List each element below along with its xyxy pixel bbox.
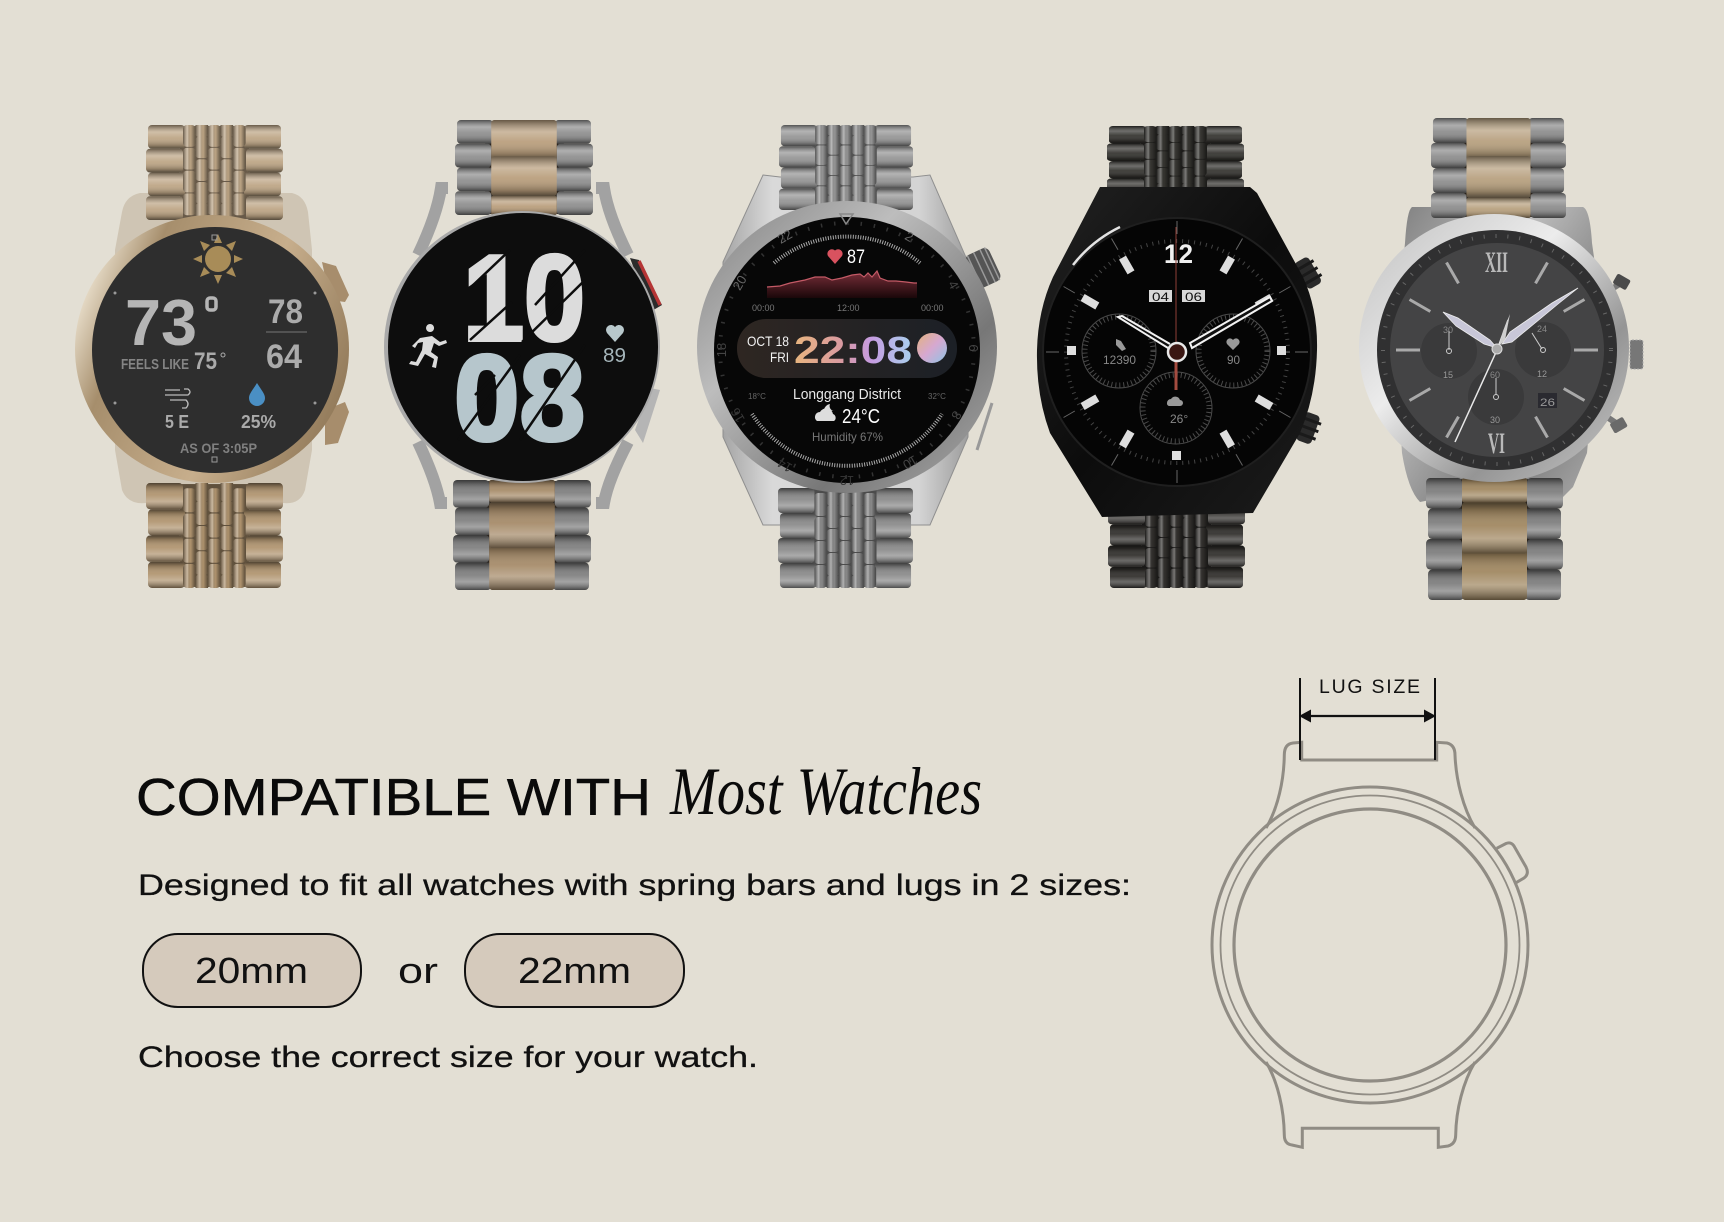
low 64: 64 [266,338,302,376]
bezel numerals: 12 [840,473,854,488]
sub-dial: weather: 26° [1170,412,1188,426]
button bottom [1293,410,1323,446]
chart time labels: 12:00 [837,303,860,313]
bottom lugs [1266,1062,1475,1147]
watch 5: analog chronograph [1359,118,1643,600]
heart rate value: 87 [847,247,865,268]
numeral VI: VI [1488,427,1505,460]
sub-dial right [1515,322,1571,379]
watch 4: black chronograph smartwatch [1037,119,1325,596]
dial dots [114,235,316,462]
humidity: Humidity 67% [812,430,883,444]
size pill: 20mm: 20mm [195,950,308,991]
pusher bottom [1607,417,1619,425]
crown [1630,340,1643,369]
arc ticks [752,237,942,466]
heading sans part: COMPATIBLE WITH [136,769,651,827]
heart rate chart [767,271,917,298]
top lugs [1266,742,1475,828]
black bead bracelet top [1107,119,1244,200]
icon: runner [409,324,447,368]
hour hand [1118,316,1170,348]
bezel numerals: 10 [900,452,920,473]
second hand tail [1174,360,1178,390]
size pill: 20mm [143,934,361,1007]
arrow [1299,710,1436,722]
numeral XII: XII [1485,246,1508,279]
small degree [221,353,225,357]
second hand [1455,320,1508,442]
bezel numerals: 6 [966,344,981,352]
outer track [1377,230,1617,470]
closing text: Choose the correct size for your watch. [138,1041,758,1074]
icon: water drop [249,383,265,406]
button top [1291,255,1325,291]
digital time: 22:08 [794,330,912,372]
minute ticks [1383,236,1611,464]
heading serif italic part: Most Watches [669,753,982,829]
gold bead bracelet top [146,116,283,225]
bezel numerals: 22 [775,226,795,247]
silver lugs [418,188,628,503]
wind value: 5 E [165,412,189,432]
lug size measurement [1299,676,1436,760]
bezel numerals: 2 [902,228,916,245]
steel lugs [1395,207,1600,502]
dial [92,227,338,473]
temperature 73: 73 [125,286,197,359]
middle ring [1220,796,1520,1094]
centre pin [1168,343,1186,361]
sub-dial: heart rate: 90 [1227,353,1240,367]
red button highlight [639,261,660,305]
bezel highlight [1073,227,1120,265]
icon: cloud and moon [815,404,836,421]
crown [964,246,1002,290]
dial face [1390,243,1604,457]
bezel [697,201,997,493]
crown [1497,843,1527,883]
inner dial ring [1234,809,1506,1081]
digit slashes [458,250,585,440]
steel and gold bracelet bottom [1426,478,1563,600]
location: Longgang District [793,386,902,403]
steel bead bracelet bottom [778,483,913,598]
red button [630,258,662,312]
silver case and lugs [723,175,968,525]
temperature: 24°C [842,406,880,428]
black glass [714,217,980,483]
black glass [388,213,658,481]
updated time: AS OF 3:05P [180,440,257,456]
divider [266,331,307,333]
steel bead bracelet top [779,116,913,214]
icon: heart [827,249,843,264]
hour 10: 10 [463,230,585,366]
sub-dial: weather [1140,372,1212,444]
bezel numerals [714,226,981,488]
date boxes [1149,290,1205,302]
second hand tip [1499,314,1510,346]
time pill [737,319,957,378]
steel and gold bracelet bottom [453,480,591,590]
low temperature: 18°C [748,392,766,401]
minute hand [1190,297,1272,348]
numeral 12: 12 [1164,239,1193,269]
silver button [635,388,660,443]
size pill: 22mm [465,934,684,1007]
heart rate: 89 [603,345,626,367]
chart line [767,271,917,287]
intro text: Designed to fit all watches with spring bars and lugs in 2 sizes: [138,869,1131,902]
sub-dial centre: 30 [1490,415,1500,425]
high 78: 78 [268,293,303,331]
icon: heart [606,325,624,342]
steel and gold bracelet top [455,120,593,215]
sub-dial right: 12 [1537,369,1547,379]
gold bezel [75,215,349,483]
hour markers [1396,262,1598,438]
case ring [384,211,660,483]
hour markers [1067,256,1286,460]
sub-dial left: 15 [1443,370,1453,380]
watch outline diagram [1212,742,1528,1147]
size pill: 22mm: 22mm [518,950,631,991]
pusher top cap [1612,273,1631,290]
bezel hour ticks [720,223,974,477]
feels like label: FEELS LIKE [121,356,189,373]
top triangle marker [840,214,853,224]
minute 08: 08 [454,330,585,466]
sub-dial centre: 60 [1490,370,1500,380]
colour orb [917,333,947,363]
minute track [1066,241,1288,463]
right guide line [1434,678,1436,760]
side button [977,403,992,450]
sub-dial left [1421,323,1477,380]
degree mark [207,298,216,310]
sub-dial: steps: 12390 [1103,353,1136,367]
button top [322,262,349,302]
high temperature: 32°C [928,392,946,401]
chart time labels [752,303,944,313]
minute hand [1502,288,1578,344]
sub-dial: steps [1082,314,1156,388]
or label: or [398,950,438,991]
feels like value: 75 [194,348,217,375]
hour ticks [1046,221,1308,483]
heading [136,753,982,829]
bezel numerals: 18 [714,343,729,357]
date: OCT 18 [747,333,789,349]
pusher bottom cap [1609,417,1628,434]
outer case circle [1212,787,1528,1103]
black bead bracelet bottom [1108,499,1245,596]
sub-dial: heart rate [1196,314,1270,388]
steel and gold bracelet top [1431,118,1566,218]
watch 2: digital 10 08 watch [384,120,662,590]
champagne case and lugs [115,193,312,503]
precipitation value: 25% [241,412,276,432]
date day: 06 [1185,290,1202,304]
bezel numerals: 14 [775,455,795,476]
silver bezel [1359,214,1629,482]
weekday: FRI [770,349,789,365]
watch 1: gold weather watch [75,116,349,598]
chart time labels: 00:00 [752,303,775,313]
button bottom [325,402,349,445]
date window [1538,393,1557,408]
icon: wind [165,389,190,408]
gold bead bracelet bottom [146,478,283,598]
sub-dial right: 24 [1537,324,1547,334]
dial [1043,218,1311,486]
left guide line [1299,678,1301,760]
hour hand [1443,312,1497,348]
black case [1037,187,1317,517]
watch 3: steel smartwatch with heart chart [697,116,1002,598]
lug size label: LUG SIZE [1319,676,1420,698]
bezel numerals: 4 [945,278,962,292]
bezel numerals: 16 [727,405,748,425]
sub-dial centre [1468,369,1524,425]
date month: 04 [1152,290,1169,304]
chart time labels: 00:00 [921,303,944,313]
pusher top [1610,282,1623,290]
date: 26 [1540,397,1555,409]
bezel numerals: 8 [948,408,965,422]
second hand [1175,227,1177,345]
icon: sun [193,234,243,284]
sub-dial left: 30 [1443,325,1453,335]
bezel numerals: 20 [729,273,750,293]
centre pin [1492,344,1502,354]
